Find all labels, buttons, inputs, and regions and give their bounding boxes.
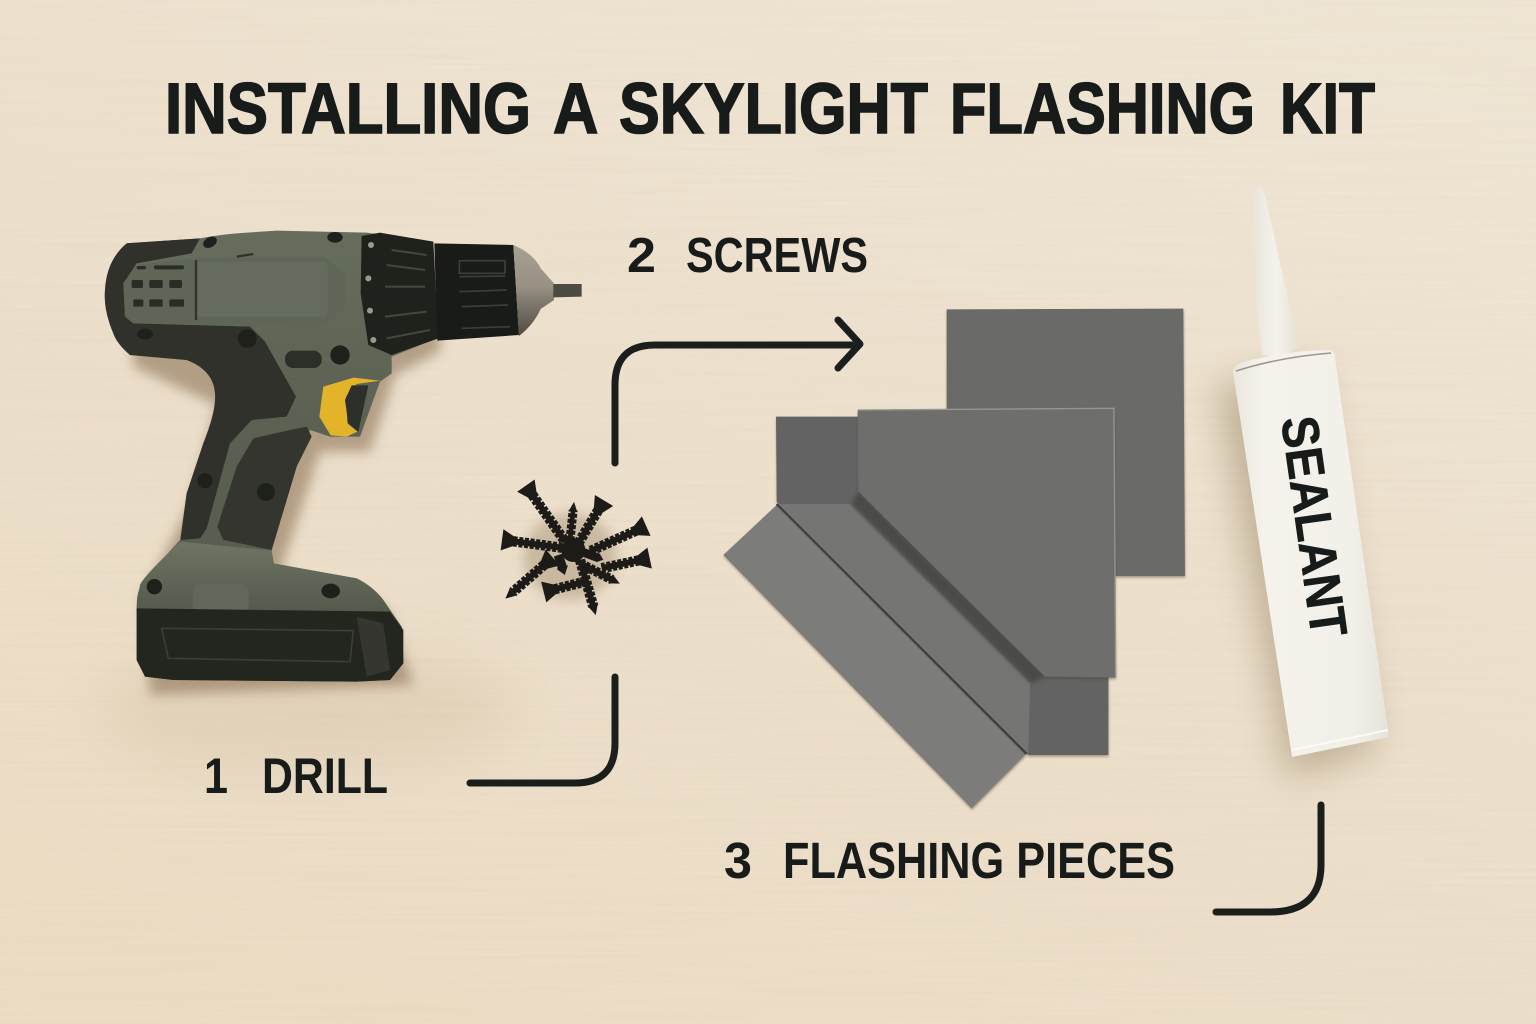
label: drill: 1 <box>204 748 228 804</box>
back square plate <box>947 309 1185 576</box>
label: flashing pieces: FLASHING PIECES <box>783 832 1175 889</box>
corner flashing plate <box>858 408 1116 678</box>
battery base <box>137 608 403 682</box>
driver bit <box>553 284 582 297</box>
title: A <box>553 70 597 149</box>
screw <box>541 571 588 602</box>
screw <box>517 479 574 548</box>
title: FLASHING <box>950 70 1255 149</box>
screw <box>566 501 578 540</box>
vent slots <box>132 265 184 307</box>
screw <box>569 495 613 549</box>
title: SKYLIGHT <box>619 70 928 149</box>
arrow: sealant to flashing label <box>1216 805 1321 912</box>
screw <box>501 529 568 559</box>
clutch collar <box>361 233 438 355</box>
icon: screws pile <box>498 479 652 616</box>
arrow: drill to screws <box>470 677 615 783</box>
battery upper shell <box>137 542 398 623</box>
screw <box>578 559 622 588</box>
battery latch <box>193 584 249 614</box>
screw <box>575 546 605 564</box>
chuck <box>434 243 519 341</box>
screw holes <box>137 232 350 501</box>
front grip <box>217 427 312 550</box>
label: drill: DRILL <box>262 748 388 804</box>
rear and upper grip <box>105 238 296 540</box>
screw <box>576 559 600 616</box>
stepped flashing piece <box>776 417 1108 755</box>
drill body silhouette <box>105 231 437 682</box>
sealant label: SEALANT <box>1269 413 1357 641</box>
label: screws: SCREWS <box>686 229 868 283</box>
label: flashing pieces: 3 <box>724 832 752 889</box>
shadow under corner plate <box>852 492 1045 683</box>
screw <box>586 516 651 561</box>
yellow trigger <box>319 378 380 437</box>
icon: sealant tube <box>1217 188 1389 778</box>
arrow: screws to flashing <box>615 320 860 463</box>
title: KIT <box>1280 70 1375 149</box>
lower strip <box>723 504 1027 808</box>
icon: flashing pieces <box>723 309 1185 808</box>
battery holes <box>147 579 340 598</box>
tube body <box>1233 350 1389 757</box>
icon: cordless drill <box>105 231 582 695</box>
motor housing panel <box>123 257 345 327</box>
silver nose cone <box>513 245 554 336</box>
label: screws: 2 <box>627 229 656 283</box>
nozzle <box>1253 188 1299 356</box>
screw <box>498 549 560 607</box>
screw <box>553 553 571 577</box>
screw <box>599 548 652 579</box>
title: INSTALLING <box>165 70 531 149</box>
